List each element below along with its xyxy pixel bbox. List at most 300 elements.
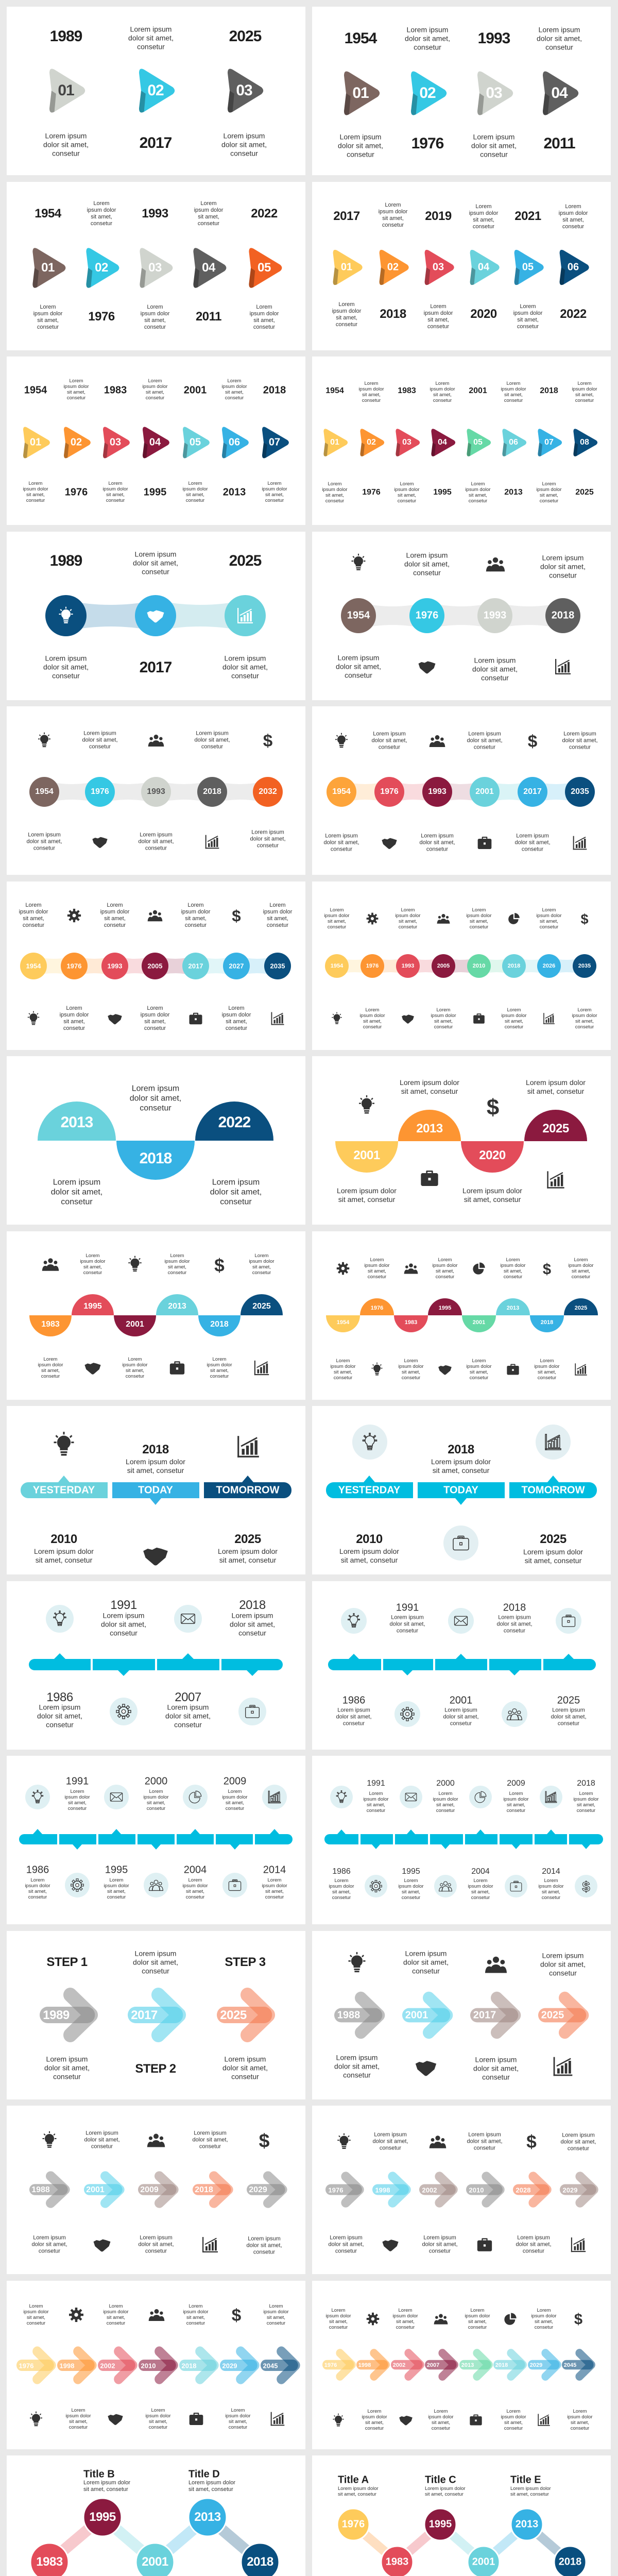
panel: 8-segment bar timeline	[312, 1756, 611, 1924]
text: consetur	[558, 1720, 579, 1726]
year: 2010	[50, 1532, 77, 1546]
text: Lorem	[507, 381, 520, 386]
number: 01	[41, 261, 55, 274]
text: dolor sit amet,	[472, 665, 518, 673]
year: 2011	[543, 135, 575, 152]
text	[43, 654, 89, 680]
text: Lorem ipsum dolor	[400, 1078, 459, 1087]
step title: STEP 2	[135, 2062, 176, 2075]
text: ipsum dolor	[501, 1013, 527, 1018]
text	[443, 1707, 479, 1727]
text: sit amet,	[473, 216, 494, 223]
year: 2017	[131, 2008, 158, 2022]
year: 1995	[402, 1867, 420, 1876]
title: Title D	[188, 2469, 220, 2480]
text	[560, 2132, 596, 2153]
text	[102, 481, 128, 503]
text: ipsum dolor	[431, 1013, 456, 1018]
text: Lorem ipsum	[248, 2236, 281, 2242]
text: consetur	[336, 321, 357, 328]
text: consetur	[414, 43, 441, 52]
text: Lorem ipsum	[474, 656, 516, 664]
text: Lorem	[109, 481, 122, 486]
text: consetur	[474, 744, 495, 750]
panel: zigzag circles titles A-F	[312, 2455, 611, 2576]
text: Lorem	[188, 1877, 202, 1883]
text	[465, 2307, 490, 2330]
text: Lorem	[44, 1356, 57, 1362]
year: 1976	[329, 2187, 343, 2194]
text: consetur	[436, 1808, 455, 1814]
text: Lorem	[537, 2307, 551, 2313]
text: dolor sit amet,	[222, 2063, 268, 2072]
text: Lorem ipsum	[444, 1707, 477, 1713]
text: consetur	[436, 1274, 454, 1280]
number: 07	[544, 438, 554, 447]
year: 2025	[252, 1301, 271, 1311]
year: 2025	[542, 1122, 569, 1136]
text: Lorem	[328, 481, 341, 487]
year: 1986	[26, 1864, 49, 1875]
text	[523, 1548, 583, 1565]
text: consetur	[61, 1197, 93, 1207]
text: consetur	[39, 2248, 60, 2255]
text: Lorem	[268, 481, 281, 486]
text	[263, 902, 292, 928]
text: Lorem	[29, 2303, 43, 2309]
arrow shapes	[23, 427, 289, 459]
text: Lorem ipsum	[391, 1614, 424, 1620]
arrow shapes	[323, 429, 597, 456]
text: dolor sit amet,	[31, 2241, 67, 2247]
number: 04	[202, 261, 215, 274]
text	[221, 378, 247, 401]
text: consetur	[229, 2425, 247, 2430]
text	[44, 2055, 90, 2081]
year: 2022	[251, 206, 278, 221]
text: ipsum dolor	[164, 1258, 190, 1264]
year: 2018	[210, 1320, 229, 1328]
text: consetur	[549, 571, 577, 579]
text: sit amet,	[505, 1018, 523, 1024]
text: Lorem ipsum	[498, 1614, 531, 1620]
text: ipsum dolor	[332, 308, 361, 314]
year: 1954	[332, 787, 351, 796]
text: consetur	[144, 1025, 166, 1031]
text: Lorem	[200, 200, 217, 206]
text: Lorem ipsum	[539, 26, 580, 34]
text: Lorem	[29, 481, 42, 486]
text: dolor sit amet,	[44, 2063, 90, 2072]
text: ipsum dolor	[362, 2414, 387, 2419]
text: consetur	[347, 150, 374, 159]
panel: 7 arrows timeline	[7, 357, 305, 525]
number: 06	[509, 438, 518, 447]
text: Lorem	[573, 2408, 587, 2414]
text: ipsum dolor	[430, 386, 455, 392]
year: 1954	[331, 962, 343, 969]
step title: STEP 3	[225, 1955, 266, 1969]
text: consetur	[140, 1104, 171, 1113]
text	[472, 656, 518, 682]
text: Lorem ipsum	[421, 833, 454, 839]
text: sit amet,	[26, 492, 45, 498]
text: consetur	[429, 2248, 451, 2255]
text: Lorem	[269, 902, 286, 908]
year: 2029	[530, 2362, 542, 2368]
text: sit amet,	[334, 1369, 352, 1375]
text: Lorem ipsum	[516, 833, 549, 839]
text	[332, 301, 362, 328]
text	[250, 829, 286, 849]
text: dolor sit amet,	[551, 1714, 587, 1720]
text: sit amet,	[144, 1018, 166, 1024]
year: 2009	[224, 1775, 246, 1787]
panel: 7 connected colored circles	[7, 881, 305, 1050]
text: sit amet,	[252, 1264, 271, 1269]
text: dolor sit amet,	[26, 839, 62, 845]
text: consetur	[412, 1967, 440, 1975]
text: ipsum dolor	[538, 1884, 564, 1889]
text: sit amet,	[538, 1369, 556, 1375]
year: 1989	[50, 552, 82, 569]
year: 2002	[422, 2187, 437, 2194]
year: 2029	[222, 2362, 237, 2369]
panel: 5 connected year circles	[7, 706, 305, 875]
text	[536, 907, 562, 929]
year: 1983	[36, 2555, 63, 2569]
text: Lorem	[385, 202, 401, 208]
text: consetur	[523, 2248, 544, 2255]
text: dolor sit amet,	[372, 2138, 408, 2144]
text	[559, 203, 588, 230]
text: dolor sit amet,	[165, 1711, 211, 1720]
text: sit amet,	[144, 317, 166, 324]
text: Lorem	[578, 1007, 591, 1013]
text	[430, 381, 455, 403]
text	[526, 1078, 586, 1096]
year: 1993	[484, 609, 506, 621]
panel: yesterday today tomorrow ribbon	[7, 1406, 305, 1574]
text	[82, 731, 118, 750]
text: sit amet,	[382, 215, 404, 222]
panel: 4 connected year circles	[312, 532, 611, 700]
text: ipsum dolor	[501, 386, 526, 392]
text: Lorem ipsum	[140, 832, 173, 838]
text: sit amet,	[468, 2318, 487, 2325]
year: 2018	[495, 2362, 508, 2368]
year: 2001	[475, 787, 494, 796]
text: dolor sit amet,	[101, 1620, 146, 1628]
number: 05	[258, 261, 271, 274]
connected circles and icons	[312, 706, 611, 875]
text: sit amet, consetur	[338, 1195, 395, 1204]
text: consetur	[538, 1375, 556, 1381]
text: dolor sit amet,	[222, 663, 268, 671]
text: dolor sit amet,	[336, 1714, 372, 1720]
text: consetur	[562, 224, 584, 230]
bar and icons	[7, 1581, 305, 1750]
year: 1976	[65, 486, 88, 498]
text	[263, 2303, 289, 2326]
text: Lorem	[71, 1789, 84, 1794]
connected circles and icons	[312, 532, 611, 700]
panel: 8 semicircle wave	[312, 1231, 611, 1399]
connected circles and icons	[7, 881, 305, 1050]
text: dolor sit amet,	[514, 840, 551, 846]
text	[104, 1877, 129, 1900]
text: sit amet,	[434, 1018, 453, 1024]
text: sit amet,	[368, 1268, 386, 1274]
semicircle wave and icons	[312, 1056, 611, 1225]
text: sit amet,	[63, 1018, 85, 1024]
text: consetur	[380, 2145, 401, 2151]
text: dolor sit amet,	[133, 558, 178, 567]
text: consetur	[145, 845, 167, 851]
text: consetur	[575, 1024, 594, 1029]
arrow shapes	[344, 71, 579, 115]
text: Lorem	[400, 481, 414, 487]
text: Lorem ipsum	[542, 1951, 583, 1959]
text	[87, 200, 116, 227]
text: dolor sit amet,	[338, 141, 383, 149]
text: Lorem	[72, 2407, 85, 2413]
text: dolor sit amet,	[371, 738, 407, 744]
text	[433, 1791, 458, 1814]
text	[194, 200, 224, 227]
text: Lorem ipsum	[373, 731, 406, 737]
text: sit amet,	[329, 2318, 348, 2325]
text: sit amet,	[504, 1268, 522, 1274]
year: 2013	[223, 486, 246, 498]
text: sit amet,	[517, 316, 539, 323]
text: Lorem ipsum	[46, 2055, 88, 2063]
year: 2018	[503, 1602, 526, 1613]
text: Lorem	[189, 2303, 202, 2309]
text	[537, 26, 582, 52]
text: ipsum dolor	[225, 2413, 251, 2418]
text: consetur	[382, 222, 404, 228]
panel: 3 connected circles with icons	[7, 532, 305, 700]
text: consetur	[343, 1720, 365, 1726]
year: 1954	[325, 386, 344, 395]
text: Lorem	[474, 1878, 487, 1884]
text: sit amet,	[185, 915, 207, 921]
text: Lorem	[368, 2408, 381, 2414]
text: sit amet, consetur	[219, 1556, 276, 1564]
text: consetur	[198, 221, 219, 227]
text: consetur	[69, 2425, 88, 2430]
text: dolor sit amet,	[443, 1714, 479, 1720]
text: sit amet,	[575, 392, 594, 398]
number: 06	[568, 261, 579, 273]
text	[431, 1458, 491, 1475]
text	[500, 1257, 526, 1280]
text: Lorem ipsum dolor	[510, 2486, 551, 2492]
text: consetur	[540, 498, 558, 504]
text: sit amet,	[398, 493, 416, 498]
text: ipsum dolor	[428, 2414, 454, 2419]
year: 1976	[380, 787, 399, 796]
text	[246, 2236, 282, 2256]
text: Lorem	[335, 1878, 348, 1884]
text: ipsum dolor	[398, 1884, 424, 1889]
connected circles and icons	[7, 706, 305, 875]
year: 2000	[145, 1775, 167, 1787]
text: dolor sit amet,	[246, 2242, 282, 2248]
text: sit amet, consetur	[188, 2486, 233, 2493]
number: 04	[149, 437, 161, 448]
text: consetur	[186, 1894, 204, 1900]
text: consetur	[471, 1895, 490, 1901]
text: Lorem	[366, 1007, 379, 1013]
text: consetur	[185, 922, 207, 928]
text: consetur	[325, 498, 344, 504]
chevron arrows and icons	[7, 2106, 305, 2274]
text	[473, 2055, 519, 2081]
year: 1993	[108, 962, 122, 970]
text: Lorem	[439, 1791, 452, 1797]
text: sit amet,	[577, 1802, 595, 1808]
text: consetur	[199, 2143, 221, 2149]
year: 2007	[427, 2362, 439, 2368]
text: consetur	[68, 1806, 87, 1811]
text: sit amet,	[396, 2318, 415, 2325]
year: 2021	[514, 209, 541, 223]
text: ipsum dolor	[379, 208, 407, 214]
year: 2002	[100, 2362, 115, 2369]
year: 2004	[184, 1864, 207, 1875]
year: 2018	[540, 386, 558, 395]
text: consetur	[107, 1894, 126, 1900]
text: sit amet,	[328, 918, 346, 924]
text: sit amet,	[253, 317, 275, 324]
panel: 5 arrows timeline	[7, 181, 305, 350]
chevron arrows and icons	[312, 2106, 611, 2274]
text: Lorem ipsum	[28, 832, 61, 838]
year: 2000	[436, 1779, 455, 1788]
text: ipsum dolor	[465, 2313, 490, 2318]
text: sit amet,	[507, 1802, 525, 1808]
year: 2017	[140, 658, 171, 676]
year: 1991	[66, 1775, 89, 1787]
text: Lorem ipsum	[338, 653, 379, 662]
text: sit amet, consetur	[36, 1556, 92, 1564]
text: sit amet, consetur	[127, 1466, 184, 1475]
text: consetur	[569, 744, 591, 750]
year: 2025	[575, 488, 594, 497]
text	[222, 2055, 268, 2081]
text: Lorem	[255, 1253, 268, 1258]
year: 1991	[110, 1598, 137, 1612]
year: 2020	[479, 1148, 506, 1162]
text: Lorem ipsum	[85, 2130, 118, 2136]
year: 2018	[559, 2556, 581, 2568]
text: Lorem ipsum	[374, 2132, 407, 2138]
text	[465, 481, 491, 504]
year: 2013	[61, 1114, 93, 1131]
text	[330, 1358, 356, 1381]
text: sit amet,	[365, 2419, 384, 2426]
text: consetur	[144, 324, 166, 330]
text: consetur	[363, 1024, 382, 1029]
panel: 7 colored chevrons	[7, 2280, 305, 2449]
text	[143, 1789, 169, 1811]
text	[371, 731, 407, 751]
number: 03	[402, 438, 411, 447]
text: Lorem ipsum	[225, 2055, 266, 2063]
text	[51, 1178, 102, 1207]
text: ipsum dolor	[222, 1012, 251, 1018]
text: sit amet,	[267, 915, 288, 921]
text	[572, 381, 597, 403]
ribbon label: TOMORROW	[522, 1485, 585, 1496]
text: sit amet,	[572, 1268, 590, 1274]
chevron arrows and icons	[7, 2280, 305, 2449]
text: ipsum dolor	[60, 1012, 89, 1018]
text: ipsum dolor	[141, 310, 169, 316]
text	[126, 1458, 185, 1475]
year: 2013	[504, 488, 523, 497]
text: consetur	[399, 924, 417, 929]
title: Title C	[425, 2474, 456, 2485]
text	[141, 304, 170, 330]
text: consetur	[231, 2072, 259, 2080]
text: consetur	[257, 843, 279, 849]
text	[572, 1007, 597, 1029]
year: 2018	[541, 1319, 553, 1325]
year: 2013	[416, 1122, 443, 1136]
text	[419, 833, 455, 853]
text	[338, 2486, 379, 2497]
text: ipsum dolor	[221, 384, 247, 389]
year: 1993	[428, 787, 447, 796]
text: sit amet,	[83, 1264, 102, 1269]
text: consetur	[480, 150, 508, 159]
text	[181, 902, 210, 928]
text: Lorem ipsum	[406, 551, 448, 559]
number: 03	[486, 84, 502, 101]
text	[64, 1789, 90, 1811]
text: consetur	[53, 2072, 81, 2080]
year: 2005	[437, 962, 450, 969]
number: 02	[419, 84, 436, 101]
text	[573, 1791, 599, 1814]
text: consetur	[505, 1024, 523, 1029]
text: dolor sit amet,	[540, 562, 586, 570]
text: sit amet,	[571, 2419, 589, 2426]
text: ipsum dolor	[500, 1262, 526, 1268]
text: ipsum dolor	[364, 1262, 390, 1268]
text	[328, 2235, 364, 2255]
text: consetur	[52, 149, 80, 158]
text: ipsum dolor	[503, 1797, 529, 1802]
text: Lorem ipsum	[407, 26, 448, 34]
text: ipsum dolor	[568, 1262, 594, 1268]
text	[395, 907, 421, 929]
text: dolor sit amet,	[496, 1621, 533, 1627]
year: 2005	[148, 962, 162, 970]
text: ipsum dolor	[324, 913, 350, 918]
panel: 7-segment bar timeline	[7, 1756, 305, 1924]
text	[141, 1005, 169, 1031]
text	[379, 202, 408, 228]
text: consetur	[362, 398, 381, 403]
text: consetur	[328, 924, 346, 929]
year: 2018	[380, 307, 406, 320]
text: Lorem ipsum dolor	[462, 1187, 522, 1195]
text: sit amet,	[68, 1800, 87, 1806]
